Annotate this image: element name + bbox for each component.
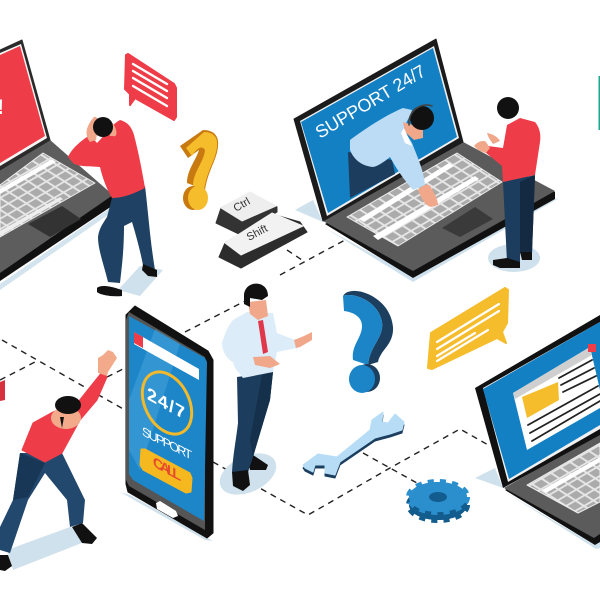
phone: 24/7 support call: SUPPORT [142, 424, 192, 463]
support agent leaning out of screen [348, 105, 438, 207]
search bar [134, 332, 199, 380]
icon: wrench [303, 412, 404, 478]
person: frustrated man with phone [0, 350, 117, 571]
icon: blue question mark [343, 291, 393, 393]
laptop: error screen [0, 40, 118, 290]
speech bubble: red [125, 54, 176, 120]
keyboard keys: Ctrl and Shift [216, 192, 307, 268]
call button [140, 449, 192, 493]
laptop: support 24/7 [294, 39, 559, 282]
screen text: SUPPORT 24/7 [312, 61, 429, 142]
person: customer in red at laptop [474, 97, 540, 272]
dashed connector lines [0, 240, 490, 515]
keyboard keys: Ctrl and Shift: Shift [245, 223, 270, 244]
person: support agent with headset [213, 284, 312, 503]
home button [156, 501, 178, 518]
24/7 ring [132, 364, 202, 442]
phone: 24/7 support call: 24/7 [147, 384, 185, 425]
red edge fragment [0, 380, 5, 401]
speech bubble: yellow [428, 288, 508, 369]
phone: 24/7 support call [120, 306, 213, 541]
keyboard keys: Ctrl and Shift: Ctrl [232, 196, 252, 215]
laptop: web page screen [475, 315, 600, 549]
browser window [513, 344, 600, 450]
icon: gear [409, 482, 467, 520]
partial green element at right edge [598, 76, 600, 130]
person: stressed man holding head [68, 117, 163, 296]
phone: 24/7 support call: CALL [153, 454, 181, 485]
icon: gold question mark [180, 130, 218, 210]
